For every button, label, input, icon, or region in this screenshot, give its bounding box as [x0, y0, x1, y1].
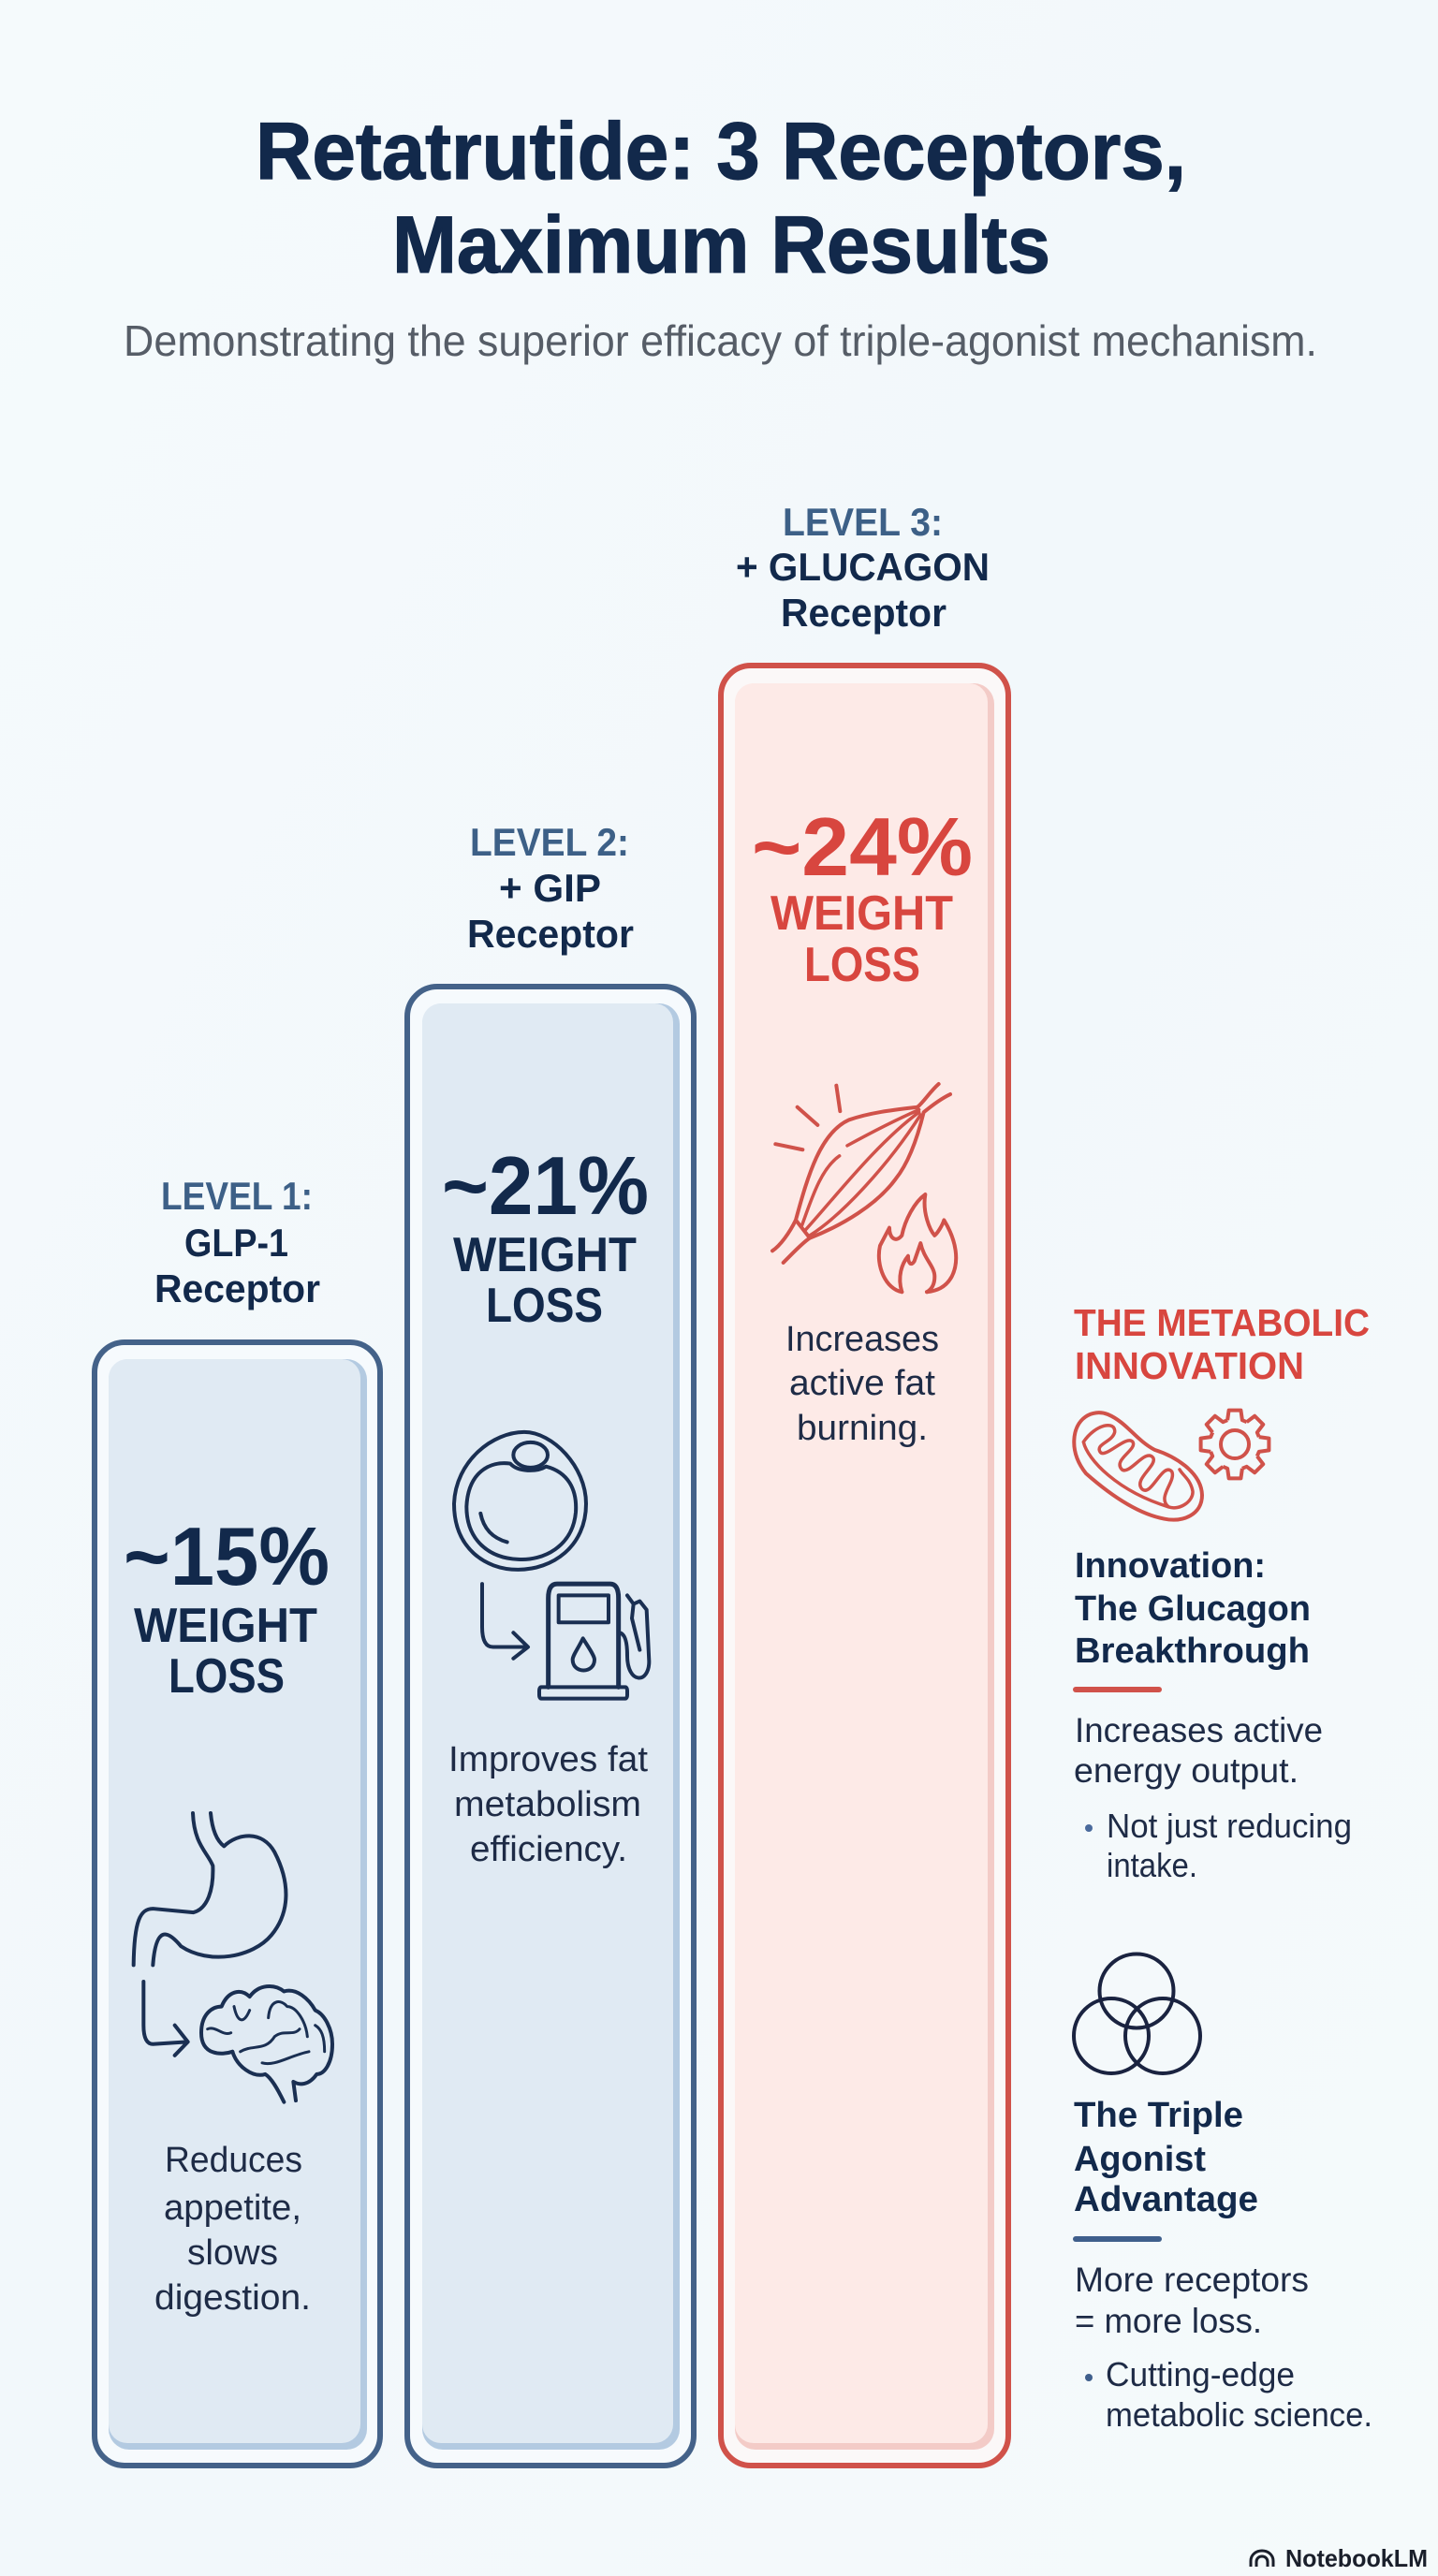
level 3 stat: WEIGHT	[770, 886, 953, 941]
panel: level 2 bar	[407, 820, 694, 2466]
red divider	[1073, 1687, 1162, 1692]
icon: mitochondrion	[1074, 1412, 1202, 1520]
triple agonist heading: Agonist	[1074, 2140, 1206, 2179]
level 2 description	[448, 1740, 648, 1869]
level 3 heading	[736, 500, 990, 635]
level 3 heading: LEVEL 3:	[783, 500, 943, 544]
level 1 description	[154, 2141, 311, 2318]
glucagon body text: energy output.	[1074, 1751, 1299, 1790]
level 3 description: Increases	[785, 1320, 939, 1359]
level 2 heading: Receptor	[467, 912, 634, 956]
level 1 stat	[124, 1510, 330, 1704]
level 1 stat: LOSS	[169, 1649, 285, 1704]
level 2 heading: LEVEL 2:	[470, 820, 629, 864]
level 2 description: Improves fat	[448, 1740, 648, 1779]
level 2 heading: + GIP	[499, 866, 601, 910]
innovation section heading: THE METABOLIC	[1074, 1301, 1370, 1344]
level 1 description: appetite,	[164, 2188, 301, 2228]
level 1 description: digestion.	[154, 2278, 311, 2318]
panel: triple agonist advantage	[1073, 1954, 1372, 2434]
icon: muscle with flame	[772, 1084, 956, 1292]
triple agonist heading: The Triple	[1074, 2096, 1243, 2135]
innovation section heading: INNOVATION	[1075, 1344, 1304, 1387]
innovation section heading	[1074, 1301, 1370, 1387]
level 1 stat: ~15%	[124, 1510, 330, 1603]
triple agonist bullet: metabolic science.	[1106, 2395, 1372, 2434]
level 3 description: burning.	[797, 1409, 928, 1448]
level 1 stat: WEIGHT	[134, 1599, 317, 1653]
level 3 stat: ~24%	[752, 800, 973, 893]
triple agonist heading	[1074, 2096, 1258, 2219]
level 3 heading: + GLUCAGON	[736, 545, 990, 589]
level 2 stat: ~21%	[442, 1139, 649, 1232]
level 2 heading	[467, 820, 634, 956]
glucagon bullet: intake.	[1107, 1846, 1197, 1884]
level 1 description: slows	[187, 2233, 278, 2273]
level 2 description: efficiency.	[470, 1830, 627, 1869]
level 1 heading: LEVEL 1:	[161, 1174, 313, 1218]
glucagon breakthrough heading	[1075, 1546, 1311, 1671]
panel: metabolic innovation	[1073, 1301, 1370, 1884]
glucagon breakthrough heading: The Glucagon	[1075, 1589, 1311, 1629]
triple agonist bullet	[1085, 2355, 1372, 2434]
icon: stomach to brain	[134, 1813, 332, 2102]
level 1 heading: Receptor	[154, 1266, 320, 1310]
level 1 heading: GLP-1	[184, 1221, 288, 1265]
glucagon bullet: Not just reducing	[1107, 1807, 1352, 1845]
panel: level 3 bar	[721, 500, 1008, 2466]
icon: fat cell to fuel pump	[454, 1432, 649, 1699]
icon: three overlapping circles	[1074, 1954, 1200, 2073]
level 2 description: metabolism	[454, 1785, 641, 1824]
level 2 bar frame	[407, 987, 694, 2466]
triple agonist body text: More receptors	[1075, 2261, 1309, 2299]
level 1 bar frame	[95, 1342, 380, 2466]
glucagon body text	[1074, 1711, 1323, 1790]
notebooklm badge: NotebookLM	[1285, 2544, 1428, 2572]
triple agonist body text: = more loss.	[1075, 2302, 1262, 2340]
level 2 stat: WEIGHT	[453, 1228, 637, 1282]
level 3 stat	[752, 800, 973, 992]
level 2 stat	[442, 1139, 649, 1333]
glucagon bullet	[1085, 1807, 1352, 1884]
icon: gear	[1201, 1411, 1269, 1478]
level 3 description	[785, 1320, 939, 1448]
level 3 description: active fat	[789, 1364, 935, 1403]
title: Retatrutide: 3 Receptors,	[256, 107, 1186, 197]
glucagon breakthrough heading: Innovation:	[1075, 1546, 1266, 1586]
level 2 stat: LOSS	[486, 1279, 603, 1333]
title: Maximum Results	[392, 200, 1050, 290]
level 3 bar frame	[721, 666, 1008, 2466]
glucagon breakthrough heading: Breakthrough	[1075, 1632, 1310, 1671]
level 1 heading	[154, 1174, 320, 1310]
triple agonist body text	[1075, 2261, 1309, 2340]
level 3 stat: LOSS	[804, 938, 920, 992]
icon: notebooklm logo	[1251, 2551, 1273, 2567]
level 1 description: Reduces	[165, 2141, 302, 2180]
subtitle: Demonstrating the superior efficacy of triple-agonist mechanism.	[124, 316, 1317, 365]
triple agonist heading: Advantage	[1074, 2180, 1258, 2219]
blue divider	[1073, 2236, 1162, 2242]
triple agonist bullet: Cutting-edge	[1106, 2355, 1295, 2393]
level 3 heading: Receptor	[781, 591, 946, 635]
glucagon body text: Increases active	[1075, 1711, 1323, 1749]
title	[256, 107, 1186, 290]
panel: level 1 bar	[95, 1174, 380, 2466]
